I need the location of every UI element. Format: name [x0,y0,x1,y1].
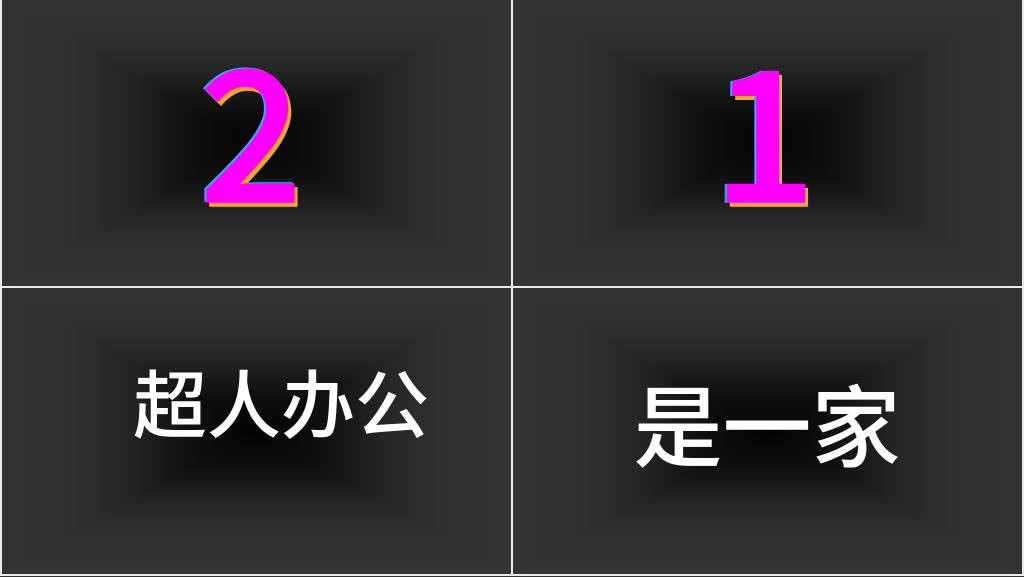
heading: 是一家: 是一家 [634,379,900,479]
heading: 超人办公: 超人办公 [133,365,429,448]
panel: bottom left text [2,288,511,574]
number 2: 2 [202,0,306,259]
number 1: 1 [715,0,819,259]
panel: bottom right text [513,288,1022,574]
panel: top right number 1 [513,0,1022,286]
panel: top left number 2 [2,0,511,286]
